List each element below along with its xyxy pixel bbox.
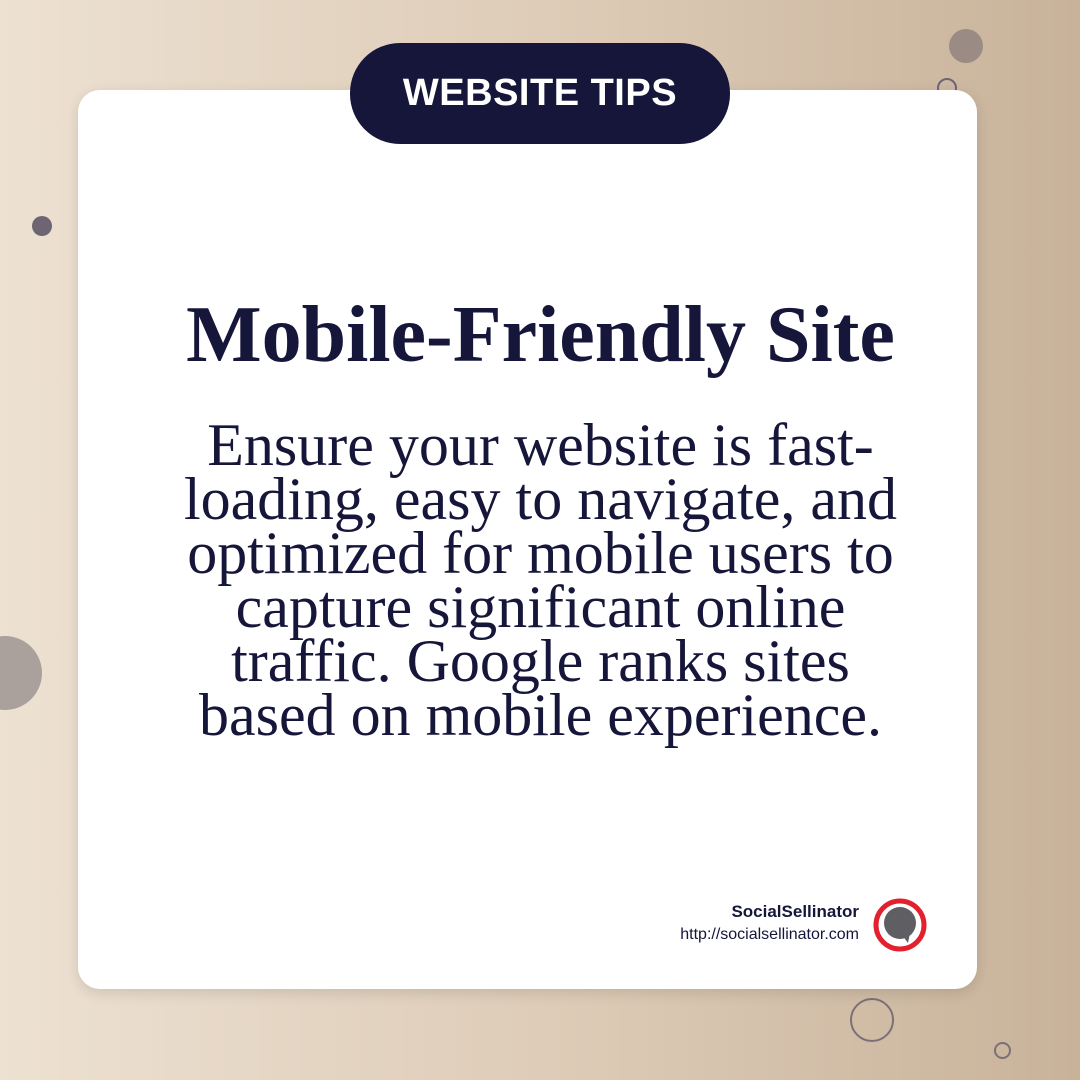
decorative circle left large bbox=[0, 636, 42, 710]
brand text: SocialSellinator bbox=[731, 902, 859, 921]
decorative circle left small bbox=[32, 216, 52, 236]
body text: capture significant online bbox=[236, 574, 845, 640]
icon: logo bbox=[874, 898, 926, 952]
panel: card bbox=[78, 90, 977, 989]
decorative outline circle bottom bbox=[850, 998, 894, 1042]
body text: based on mobile experience. bbox=[199, 682, 882, 748]
body text: Ensure your website is fast- bbox=[207, 412, 874, 478]
body text: traffic. Google ranks sites bbox=[231, 628, 850, 694]
heading pill bbox=[350, 43, 730, 144]
decorative outline circle top bbox=[937, 78, 957, 98]
brand text: http://socialsellinator.com bbox=[680, 926, 859, 943]
title: Mobile-Friendly Site bbox=[186, 291, 895, 379]
decorative outline circle bottom small bbox=[994, 1042, 1011, 1059]
decorative circle top right bbox=[949, 29, 983, 63]
body text: loading, easy to navigate, and bbox=[184, 466, 897, 532]
body text bbox=[184, 412, 897, 748]
body text: optimized for mobile users to bbox=[187, 520, 894, 586]
heading pill: WEBSITE TIPS bbox=[403, 72, 677, 114]
brand text bbox=[680, 902, 859, 943]
